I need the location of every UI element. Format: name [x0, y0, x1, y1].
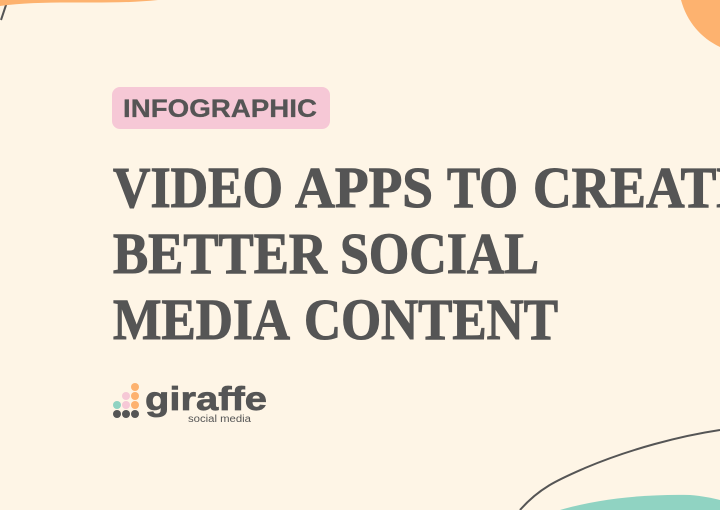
- title: MEDIA: [113, 287, 290, 352]
- blob: top right orange: [681, 0, 720, 47]
- logo wordmark: giraffe: [145, 380, 267, 417]
- blob: bottom right teal: [560, 495, 720, 510]
- title: SOCIAL: [340, 221, 539, 286]
- logo: giraffe social media: [113, 380, 267, 425]
- icon: logo dots: [113, 383, 139, 418]
- title: CONTENT: [304, 287, 558, 352]
- logo tagline: social media: [188, 414, 251, 425]
- title: APPS: [295, 155, 433, 220]
- title: TO: [447, 155, 518, 220]
- title: BETTER: [113, 221, 328, 286]
- title: [113, 155, 720, 352]
- title: VIDEO: [113, 155, 283, 220]
- line: top left curve: [1, 2, 7, 20]
- tag: infographic: [112, 87, 330, 129]
- blob: top left orange: [0, 0, 158, 6]
- tag: infographic: INFOGRAPHIC: [123, 95, 317, 123]
- line: bottom right curve: [520, 430, 720, 510]
